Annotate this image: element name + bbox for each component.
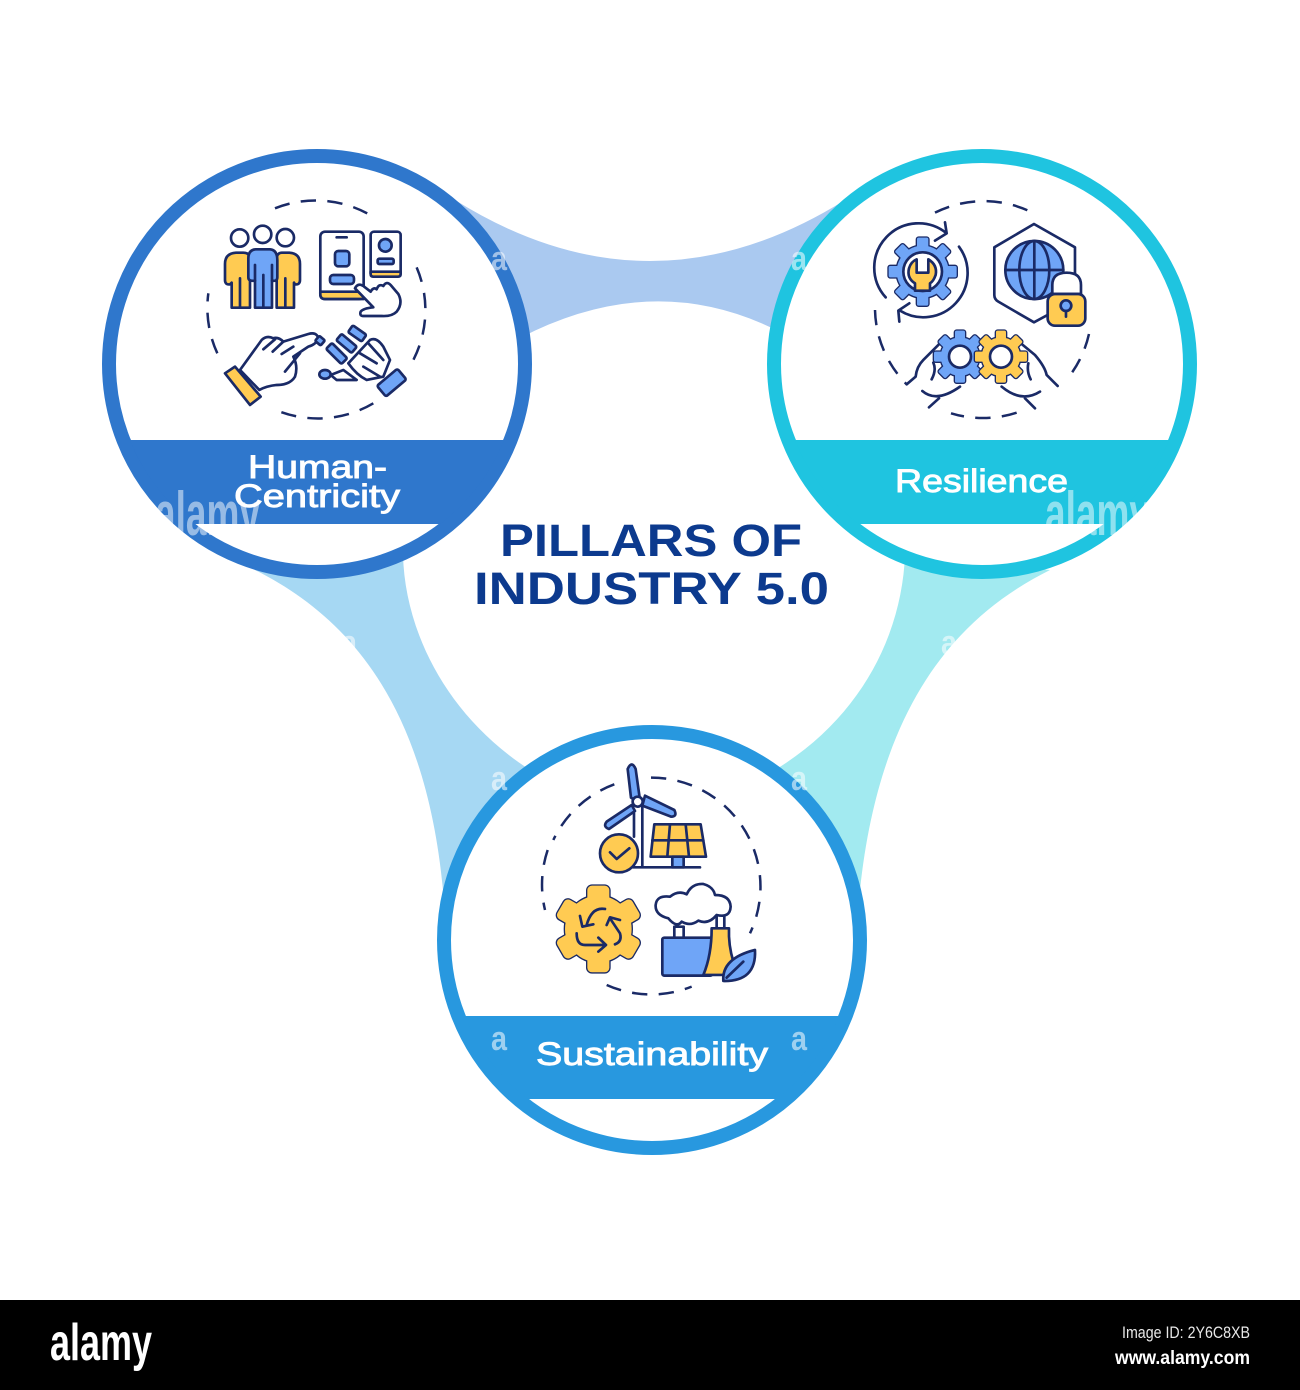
icon: sustainability cluster bbox=[542, 764, 760, 994]
watermark marks: a bbox=[791, 240, 808, 278]
title bbox=[474, 515, 829, 614]
watermark marks: alamy bbox=[1045, 480, 1150, 549]
watermark marks: a bbox=[791, 760, 808, 798]
watermark marks: a bbox=[491, 1020, 508, 1058]
connector: right band bbox=[775, 555, 1050, 890]
footer bar bbox=[0, 1300, 1300, 1390]
watermark marks bbox=[155, 240, 1150, 1058]
watermark marks: a bbox=[791, 1020, 808, 1058]
panel: Resilience bbox=[765, 156, 1199, 572]
footer logo: alamy bbox=[50, 1314, 152, 1372]
watermark marks: a bbox=[491, 240, 508, 278]
icon: human-centric cluster bbox=[207, 200, 425, 418]
banner: Human-Centricity bbox=[131, 440, 503, 524]
panel: Sustainability bbox=[435, 732, 869, 1148]
watermark marks: alamy bbox=[155, 480, 260, 549]
label: Resilience: Resilience bbox=[895, 463, 1068, 499]
panel: Human-Centricity bbox=[100, 156, 534, 572]
watermark marks: a bbox=[341, 624, 358, 662]
watermark marks: a bbox=[941, 624, 958, 662]
banner: Sustainability bbox=[466, 1016, 838, 1099]
banner: Resilience bbox=[796, 440, 1168, 524]
footer website: www.alamy.com bbox=[1114, 1348, 1250, 1369]
connector: top band bbox=[455, 200, 845, 338]
connector: left band bbox=[255, 555, 530, 890]
label: Human-Centricity: Centricity bbox=[234, 478, 400, 514]
footer image id: Image ID: 2Y6C8XB bbox=[1122, 1323, 1250, 1342]
label: Human-Centricity: Human- bbox=[248, 449, 387, 485]
icon: resilience cluster bbox=[874, 201, 1089, 418]
watermark marks: a bbox=[491, 760, 508, 798]
label: Sustainability: Sustainability bbox=[536, 1036, 768, 1072]
title: PILLARS OF bbox=[500, 515, 802, 566]
title: INDUSTRY 5.0 bbox=[474, 563, 829, 614]
label: Human-Centricity bbox=[234, 449, 400, 514]
